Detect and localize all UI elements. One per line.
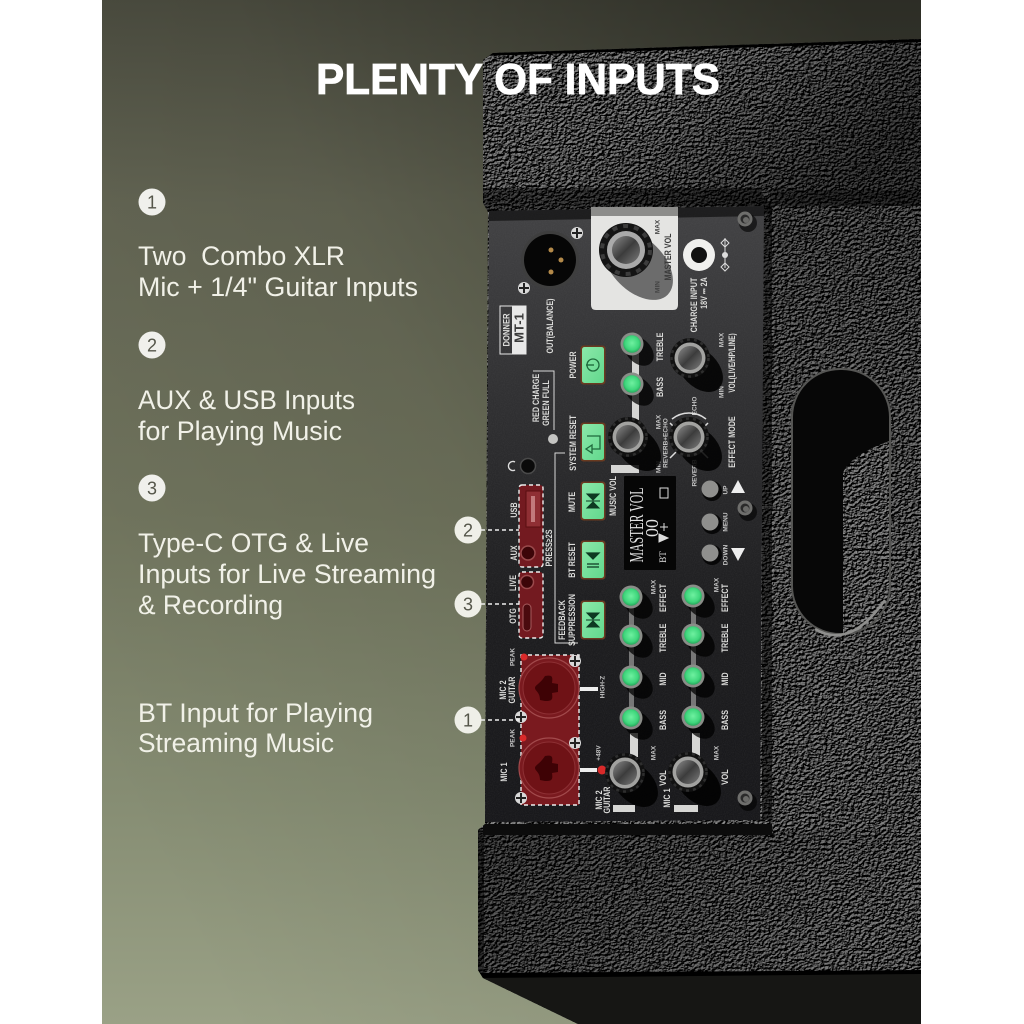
OLED display	[624, 476, 676, 570]
panel labels upper: REVERB	[692, 459, 698, 487]
feature 2: for Playing Music	[138, 416, 342, 446]
callout 1 on panel	[454, 706, 519, 734]
upper rotary knobs	[606, 337, 732, 480]
green push buttons	[580, 346, 606, 640]
panel labels upper: VOL(LIVE/HP/LINE)	[727, 333, 737, 393]
mic EQ knob column 2: EFFECT	[720, 584, 730, 612]
panel labels upper: ECHO	[692, 397, 698, 415]
menu buttons: MENU	[722, 512, 730, 532]
panel labels upper: MUSIC VOL	[608, 476, 618, 516]
master volume white highlight and knob: MASTER VOL	[663, 233, 673, 281]
callout 2 on panel: 2	[463, 520, 473, 540]
background panel	[102, 0, 921, 1024]
mic EQ knob column 1	[594, 579, 668, 816]
feature 2	[138, 332, 355, 446]
panel labels upper: MIN	[656, 461, 662, 473]
mic EQ knob column 2: MID	[720, 672, 730, 686]
panel labels upper: TREBLE	[655, 332, 665, 361]
panel labels upper: EFFECT MODE	[727, 416, 737, 468]
feedback labels: FEEDBACK	[557, 600, 567, 640]
charge input jack: CHARGE INPUT	[689, 278, 699, 332]
mic EQ knob column 2: MAX	[714, 745, 720, 760]
callout 3 on panel	[454, 590, 519, 618]
menu buttons: UP	[722, 485, 730, 495]
feature 1: 1	[147, 192, 157, 212]
feature 3: Type-C OTG & Live	[138, 528, 369, 558]
mic EQ knob column 2: MIC 1	[662, 788, 672, 808]
panel labels upper: OUT(BALANCE)	[545, 298, 555, 354]
Live and OTG highlight: OTG	[508, 608, 518, 624]
speaker cabinet	[478, 36, 921, 1024]
master volume white highlight and knob: MIN	[654, 281, 662, 293]
menu buttons: DOWN	[722, 544, 730, 565]
combo XLR highlight	[498, 648, 606, 805]
combo XLR highlight: PEAK	[510, 729, 516, 747]
icon: XLR output	[518, 227, 583, 294]
panel labels upper: MAX	[718, 332, 726, 347]
USB and AUX highlight	[509, 485, 554, 567]
panel labels upper: BASS	[655, 377, 665, 397]
headphone jack	[508, 458, 536, 474]
mic EQ knob column 2	[662, 577, 730, 815]
feedback labels: BT RESET	[567, 542, 577, 578]
feature 3: & Recording	[138, 590, 283, 620]
mic EQ knob column 1: TREBLE	[658, 623, 668, 652]
mic EQ knob column 2: MAX	[714, 577, 720, 592]
menu buttons	[702, 480, 745, 565]
panel labels upper: SYSTEM RESET	[568, 415, 578, 471]
callout 1 on panel: 1	[463, 710, 473, 730]
callout 2 on panel	[454, 516, 519, 544]
feature 1	[138, 188, 418, 302]
mic EQ knob column 1: MAX	[650, 579, 658, 594]
Live and OTG highlight: LIVE	[508, 575, 518, 591]
mic EQ knob column 1: BASS	[658, 710, 668, 730]
panel labels upper: REVERB+ECHO	[662, 418, 670, 468]
feature 3: 3	[147, 478, 157, 498]
mic EQ knob column 1: GUITAR	[602, 786, 612, 813]
mic EQ knob column 1: VOL	[658, 770, 668, 786]
USB and AUX highlight: USB	[509, 502, 519, 518]
panel labels upper: POWER	[568, 351, 578, 379]
USB and AUX highlight: PRESS≥2S	[544, 529, 554, 567]
feature 2: AUX & USB Inputs	[138, 385, 355, 415]
upper green knobs	[618, 330, 660, 412]
feature BT: Streaming Music	[138, 728, 334, 758]
mic EQ knob column 1: MID	[658, 672, 668, 686]
feedback labels: SUPPRESSION	[567, 594, 577, 646]
combo XLR highlight: +48V	[596, 745, 602, 761]
Live and OTG highlight	[508, 572, 543, 638]
combo XLR highlight: PEAK	[510, 648, 516, 666]
title: PLENTY OF INPUTS	[316, 55, 720, 104]
mic EQ knob column 2: BASS	[720, 710, 730, 730]
charge input jack: 18V ⎓ 2A	[699, 277, 709, 309]
OLED display: 00	[642, 519, 662, 537]
USB and AUX highlight: AUX	[509, 545, 519, 561]
panel labels upper: RED CHARGE	[531, 373, 541, 422]
mic EQ knob column 1: MIC 2	[594, 790, 604, 810]
panel labels upper: MIN	[718, 386, 726, 398]
feature 1: Two Combo XLR	[138, 241, 345, 271]
Donner MT-1 logo: MT-1	[512, 313, 526, 343]
control panel faceplate	[485, 206, 764, 822]
combo XLR highlight: MIC 1	[499, 762, 509, 782]
mic EQ knob column 2: VOL	[720, 769, 730, 785]
master volume white highlight and knob	[590, 207, 686, 313]
panel labels upper: GREEN FULL	[541, 380, 551, 426]
Donner MT-1 logo	[500, 306, 526, 354]
feature 3: Inputs for Live Streaming	[138, 559, 436, 589]
status LED	[548, 434, 558, 444]
charge input jack	[683, 238, 729, 332]
feature 1: Mic + 1/4" Guitar Inputs	[138, 272, 418, 302]
combo XLR highlight: MIC 2	[498, 680, 508, 700]
carrying handle recess	[792, 369, 893, 640]
feature 2: 2	[147, 336, 157, 356]
OLED display: BT	[658, 551, 668, 563]
connector bars	[611, 353, 700, 812]
feature 3	[138, 474, 436, 620]
panel labels upper	[531, 298, 737, 643]
screws	[738, 212, 757, 811]
panel labels upper: MAX	[656, 414, 662, 429]
Donner MT-1 logo: DONNER	[501, 313, 512, 347]
mic EQ knob column 1: MAX	[650, 745, 658, 760]
feature BT: BT Input for Playing	[138, 698, 373, 728]
combo XLR highlight: HIGH-Z	[600, 676, 606, 698]
combo XLR highlight: GUITAR	[507, 676, 517, 703]
feedback labels: MUTE	[567, 491, 577, 512]
callout 3 on panel: 3	[463, 594, 473, 614]
feedback labels	[557, 491, 577, 646]
OLED display: MASTER VOL	[626, 488, 648, 562]
mic EQ knob column 2: TREBLE	[720, 623, 730, 652]
feature BT	[138, 698, 373, 758]
mic EQ knob column 1: EFFECT	[658, 584, 668, 612]
master volume white highlight and knob: MAX	[654, 219, 662, 234]
